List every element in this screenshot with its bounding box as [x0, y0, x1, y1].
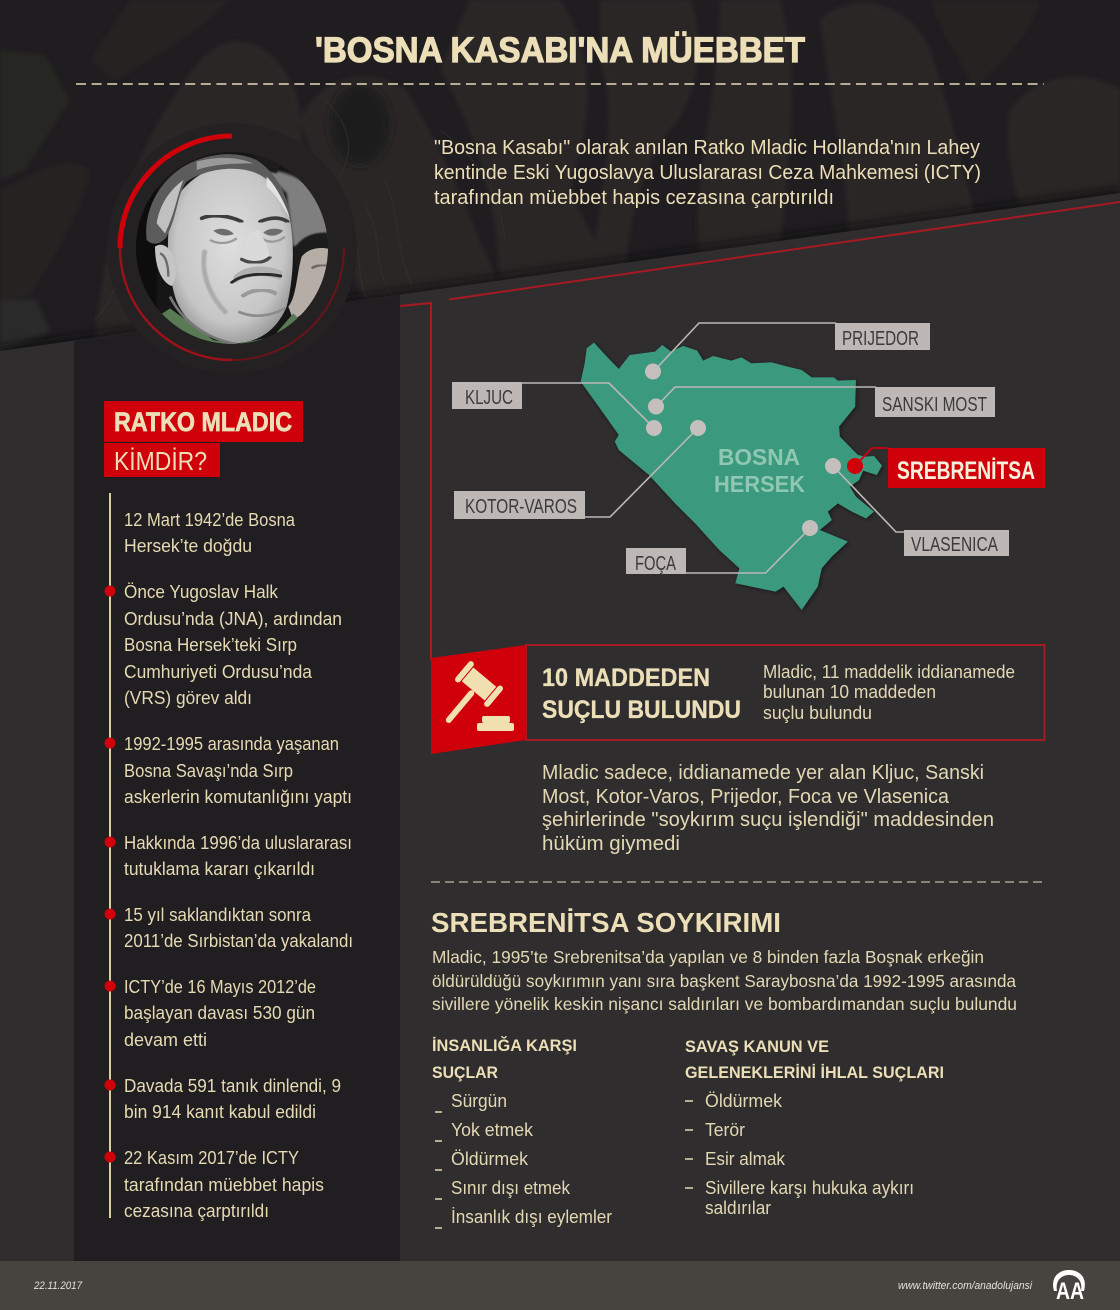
eye bags [210, 237, 285, 243]
text: acquittal note [542, 762, 994, 855]
intro text: "Bosna Kasabı" olarak anılan Ratko Mladic Hollanda'nın Lahey [434, 137, 980, 159]
biography text: 15 yıl saklandıktan sonra [124, 905, 312, 925]
biography text: Hakkında 1996’da uluslararası [124, 833, 352, 853]
column: crimes against humanity [432, 1036, 612, 1228]
heading: Kimdir: KİMDİR? [114, 446, 207, 476]
portrait photo [136, 152, 328, 344]
heading: Ratko Mladic [104, 401, 303, 442]
label: Kljuc [452, 382, 522, 409]
text: acquittal note: şehirlerinde "soykırım suçu işlendiği" maddesinden [542, 809, 994, 831]
label: Sanski Most [875, 387, 995, 417]
list of crimes: Öldürmek [705, 1091, 783, 1111]
biography text: 12 Mart 1942’de Bosna [124, 510, 296, 530]
backdrop [270, 170, 328, 248]
panel: verdict box [430, 645, 1044, 754]
map name: BOSNA [718, 444, 800, 470]
cheek shadow [204, 250, 227, 313]
list of crimes: Sivillere karşı hukuka aykırı [705, 1178, 914, 1198]
label: Kljuc: KLJUC [465, 387, 513, 409]
hair [146, 154, 292, 244]
biography text: 2011’de Sırbistan’da yakalandı [124, 931, 353, 951]
biography text: Önce Yugoslav Halk [124, 582, 279, 602]
timeline [104, 493, 116, 1218]
column heading: GELENEKLERİNİ İHLAL SUÇLARI [685, 1063, 944, 1082]
verdict heading: SUÇLU BULUNDU [542, 696, 741, 724]
label: Kotor-Varos [454, 491, 585, 519]
eyes [213, 229, 283, 236]
heading: Ratko Mladic: RATKO MLADIC [114, 407, 292, 437]
list of crimes: Yok etmek [451, 1120, 534, 1140]
biography text: ICTY’de 16 Mayıs 2012’de [124, 977, 316, 997]
red accent lines [400, 202, 1120, 660]
biography text: Bosna Savaşı’nda Sırp [124, 761, 293, 781]
map name: HERSEK [714, 471, 805, 497]
biography text: tutuklama kararı çıkarıldı [124, 859, 315, 879]
column: violations of the laws of war [685, 1037, 944, 1218]
list of crimes [685, 1091, 914, 1218]
heading: Srebrenitsa genocide: SREBRENİTSA SOYKIRIMI [431, 907, 781, 938]
list of crimes: Sınır dışı etmek [451, 1178, 571, 1198]
icon: agency logo: AA [1056, 1278, 1084, 1305]
source: www.twitter.com/anadolujansi [898, 1280, 1033, 1292]
map of Bosnia and Herzegovina [581, 343, 882, 610]
biography text: tarafından müebbet hapis [124, 1175, 324, 1195]
verdict description: suçlu bulundu [763, 703, 872, 723]
list of crimes: Sürgün [451, 1091, 507, 1111]
neighbour head [295, 232, 328, 247]
biography text: 1992-1995 arasında yaşanan [124, 734, 339, 754]
title: 'BOSNA KASABI'NA MÜEBBET [315, 31, 805, 70]
eyebrows [202, 216, 288, 222]
biography text: Hersek’te doğdu [124, 536, 252, 556]
label: Foca [626, 548, 686, 575]
biography text [124, 510, 353, 1221]
verdict heading: 10 MADDEDEN [542, 664, 710, 692]
biography text: (VRS) görev aldı [124, 688, 252, 708]
biography text: cezasına çarptırıldı [124, 1201, 269, 1221]
verdict description [763, 662, 1015, 723]
label: Prijedor [835, 323, 930, 350]
biography text: Ordusu’nda (JNA), ardından [124, 609, 342, 629]
biography text: devam etti [124, 1030, 207, 1050]
section divider [431, 881, 1044, 883]
icon: gavel [430, 660, 514, 736]
list of crimes [435, 1091, 612, 1228]
map city markers [645, 364, 841, 536]
jaw shadow [170, 297, 237, 344]
intro text [434, 137, 981, 209]
label: Kotor-Varos: KOTOR-VAROS [465, 496, 577, 518]
biography text: askerlerin komutanlığını yaptı [124, 787, 352, 807]
column heading [432, 1036, 577, 1082]
text: acquittal note: Mladic sadece, iddianamede yer alan Kljuc, Sanski [542, 762, 984, 784]
map leader lines [522, 323, 905, 573]
portrait with red ring [114, 134, 357, 362]
column heading: İNSANLIĞA KARŞI [432, 1036, 577, 1055]
neck and face [168, 163, 293, 343]
list of crimes: Esir almak [705, 1149, 786, 1169]
intro text: tarafından müebbet hapis cezasına çarptırıldı [434, 187, 834, 209]
biography text: bin 914 kanıt kabul edildi [124, 1102, 316, 1122]
nose [256, 230, 270, 260]
icon: agency logo [1053, 1270, 1085, 1305]
map name [714, 444, 805, 497]
label: Vlasenica: VLASENICA [911, 534, 999, 556]
list of crimes: Öldürmek [451, 1149, 529, 1169]
column heading: SUÇLAR [432, 1063, 498, 1082]
title divider [76, 83, 1044, 85]
text: Srebrenitsa description: öldürüldüğü soykırımın yanı sıra başkent Saraybosna’da 1992-1995 arasında [432, 971, 1016, 991]
label: Sanski Most: SANSKI MOST [882, 394, 987, 416]
moustache area [233, 266, 283, 283]
verdict heading [542, 664, 741, 724]
biography text: Bosna Hersek’teki Sırp [124, 635, 297, 655]
callout: Srebrenitsa [847, 448, 1045, 488]
column heading: SAVAŞ KANUN VE [685, 1037, 829, 1056]
biography text: Davada 591 tanık dinlendi, 9 [124, 1076, 341, 1096]
date: 22.11.2017 [33, 1280, 83, 1292]
text: acquittal note: hüküm giymedi [542, 833, 680, 855]
text: Srebrenitsa description: sivillere yönelik keskin nişancı saldırıları ve bombardımandan suçlu bulundu [432, 994, 1017, 1014]
chin shadow [242, 290, 277, 297]
collar [162, 308, 298, 344]
list of crimes: Terör [705, 1120, 745, 1140]
verdict description: bulunan 10 maddeden [763, 682, 936, 702]
text: Srebrenitsa description [432, 947, 1017, 1014]
panel: left sidebar [74, 295, 400, 1261]
biography text: Cumhuriyeti Ordusu’nda [124, 662, 313, 682]
text: acquittal note: Most, Kotor-Varos, Prijedor, Foca ve Vlasenica [542, 786, 950, 808]
label: Foca: FOÇA [635, 553, 676, 575]
label: Prijedor: PRIJEDOR [842, 328, 919, 350]
text: Srebrenitsa description: Mladic, 1995’te Srebrenitsa’da yapılan ve 8 binden fazla Boşnak erkeğin [432, 947, 984, 967]
hooded face shadow [330, 85, 390, 165]
list of crimes: İnsanlık dışı eylemler [451, 1207, 612, 1227]
background: dark crowd photo [0, 0, 1120, 360]
intro text: kentinde Eski Yugoslavya Uluslararası Ceza Mahkemesi (ICTY) [434, 162, 981, 184]
verdict description: Mladic, 11 maddelik iddianamede [763, 662, 1015, 682]
footer [0, 1261, 1120, 1310]
callout: Srebrenitsa: SREBRENİTSA [897, 457, 1035, 485]
biography text: başlayan davası 530 gün [124, 1003, 315, 1023]
list of crimes: saldırılar [705, 1198, 771, 1218]
biography text: 22 Kasım 2017’de ICTY [124, 1148, 299, 1168]
ear [155, 245, 176, 286]
column heading [685, 1037, 944, 1082]
mouth [232, 274, 281, 283]
